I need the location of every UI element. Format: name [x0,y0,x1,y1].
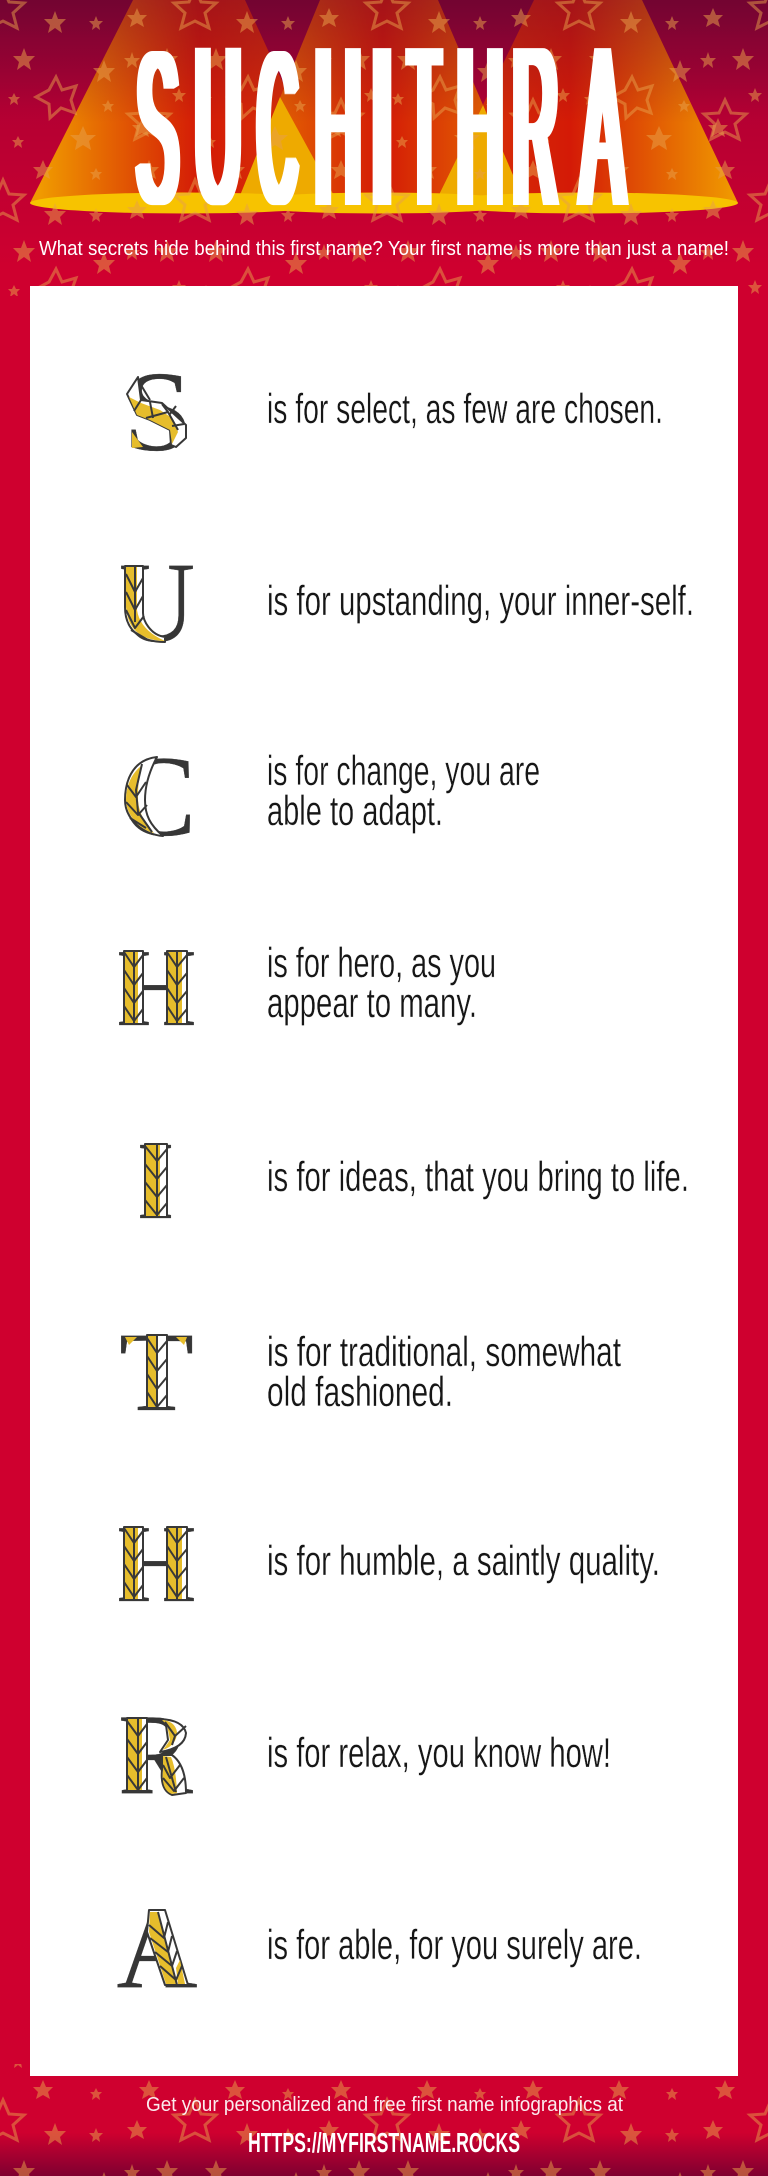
overlap highlight left [237,97,338,203]
row: C [121,733,540,861]
text: T lines: is for traditional, somewhat [267,1328,621,1375]
icon: wheat letter H: H [116,927,197,1050]
icon: wheat letter U: U [119,539,195,666]
title: U [195,0,241,252]
panel: white content card [30,286,738,2076]
icon: wheat letter H: H [116,1503,197,1626]
row: R [118,1691,611,1818]
title: C [258,5,297,250]
icon: wheat letter T: T [119,1310,194,1435]
row: H second [116,1503,660,1626]
footer text: Get your personalized and free first name infographics at [146,2094,623,2116]
text: T lines: old fashioned. [267,1368,453,1415]
title [137,0,624,254]
row: H [116,927,496,1050]
cone top shading [0,0,768,205]
title: S [137,6,178,249]
title: I [369,0,395,253]
title: H [457,0,503,254]
title: A [581,0,624,254]
icon: wheat letter C: C [121,733,196,861]
text: C lines: able to adapt. [267,787,443,834]
overlap highlight right [435,105,525,203]
icon: wheat letter I: I [136,1120,175,1243]
text: C lines [267,747,540,834]
row: T [119,1310,621,1435]
spotlight cone middle [237,0,525,203]
row: U [119,539,694,666]
text: C lines: is for change, you are [267,747,540,794]
icon: wheat letter R: R [118,1691,193,1818]
title: T [409,0,440,253]
row: I [136,1120,689,1243]
spotlight cone left [30,0,338,203]
text: T lines [267,1328,621,1415]
row: S [123,348,663,475]
subtitle: What secrets hide behind this first name? Your first name is more than just a name! [39,238,729,260]
title: H [315,0,361,254]
footer url: HTTPS://MYFIRSTNAME.ROCKS [248,2127,520,2158]
spotlight cone right [435,0,738,203]
text: H lines: appear to many. [267,979,477,1026]
row: A [116,1885,642,2012]
icon: wheat letter A: A [116,1885,198,2012]
icon: wheat letter S: S [123,348,193,475]
spotlight floor pools [30,192,738,214]
text: H lines: is for hero, as you [267,939,496,986]
spotlights [0,0,768,214]
text: R line: is for relax, you know how! [267,1729,611,1776]
title: R [513,0,557,254]
text: H lines [267,939,496,1026]
